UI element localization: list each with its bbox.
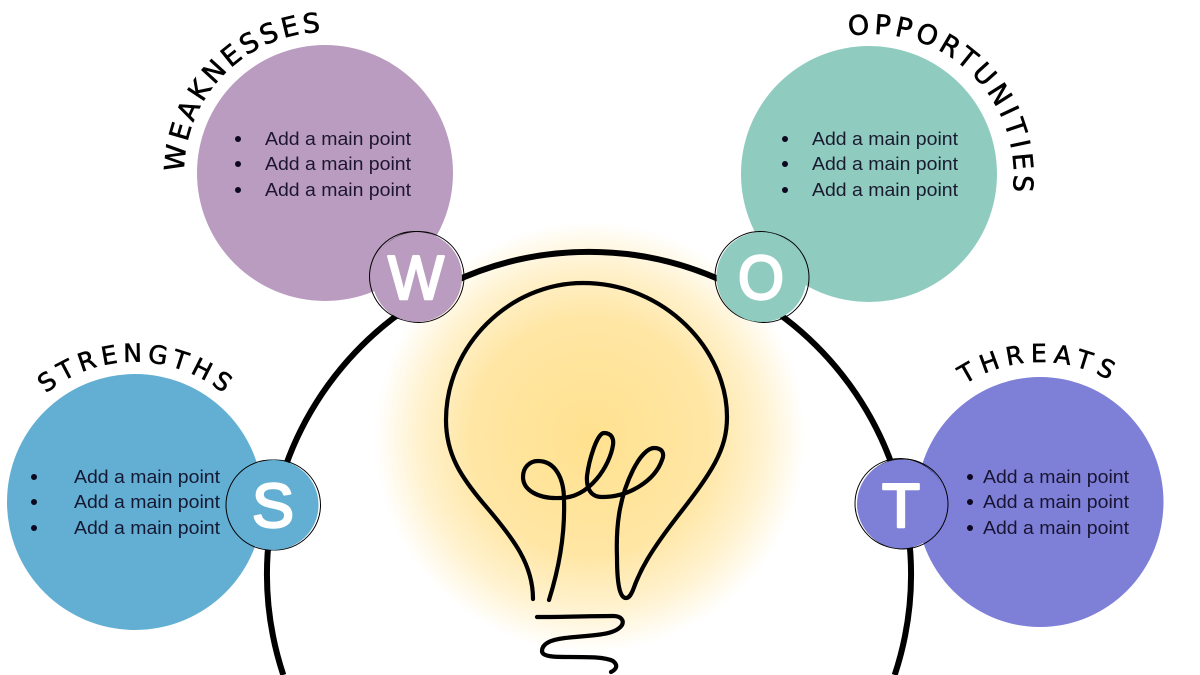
badge: O bbox=[715, 232, 809, 322]
heading: weaknesses: WEAKNESSES bbox=[164, 12, 319, 170]
bullet list: threats: Add a main point bbox=[983, 517, 1129, 538]
bullet list: threats bbox=[967, 466, 1129, 538]
bullet list: opportunities: Add a main point bbox=[812, 153, 958, 174]
bullet list: opportunities: Add a main point bbox=[812, 128, 958, 149]
heading: strengths: STRENGTHS bbox=[38, 343, 232, 392]
heading: opportunities: OPPORTUNITIES bbox=[849, 14, 1034, 191]
panel: weaknesses bbox=[164, 12, 453, 301]
badge: S: S bbox=[252, 472, 294, 541]
bullet list: opportunities bbox=[782, 128, 958, 200]
badge: W bbox=[370, 232, 464, 322]
bullet list: threats: Add a main point bbox=[983, 491, 1129, 512]
glow behind the bulb bbox=[375, 222, 805, 652]
bullet list: opportunities: Add a main point bbox=[812, 179, 958, 200]
badge: W: W bbox=[388, 244, 444, 313]
bullet list: strengths: Add a main point bbox=[74, 491, 220, 512]
badge: T bbox=[855, 458, 948, 549]
bullet list: strengths: Add a main point bbox=[74, 517, 220, 538]
panel: strengths bbox=[7, 343, 257, 630]
badge: S bbox=[226, 460, 320, 550]
bulb outline and filament bbox=[446, 283, 727, 600]
badge: O: O bbox=[738, 244, 784, 313]
bullet list: weaknesses: Add a main point bbox=[265, 128, 411, 149]
bullet list: strengths bbox=[31, 466, 220, 538]
panel: opportunities bbox=[741, 14, 1034, 302]
bullet list: weaknesses: Add a main point bbox=[265, 179, 411, 200]
panel: threats bbox=[922, 344, 1164, 627]
bullet list: threats: Add a main point bbox=[983, 466, 1129, 487]
bulb base squiggle bbox=[537, 616, 623, 672]
badge: T: T bbox=[882, 472, 920, 541]
bullet list: weaknesses: Add a main point bbox=[265, 153, 411, 174]
icon: light bulb bbox=[446, 283, 727, 672]
large arc ring bbox=[267, 252, 911, 675]
heading: threats: THREATS bbox=[954, 344, 1116, 382]
bullet list: strengths: Add a main point bbox=[74, 466, 220, 487]
bullet list: weaknesses bbox=[235, 128, 411, 200]
